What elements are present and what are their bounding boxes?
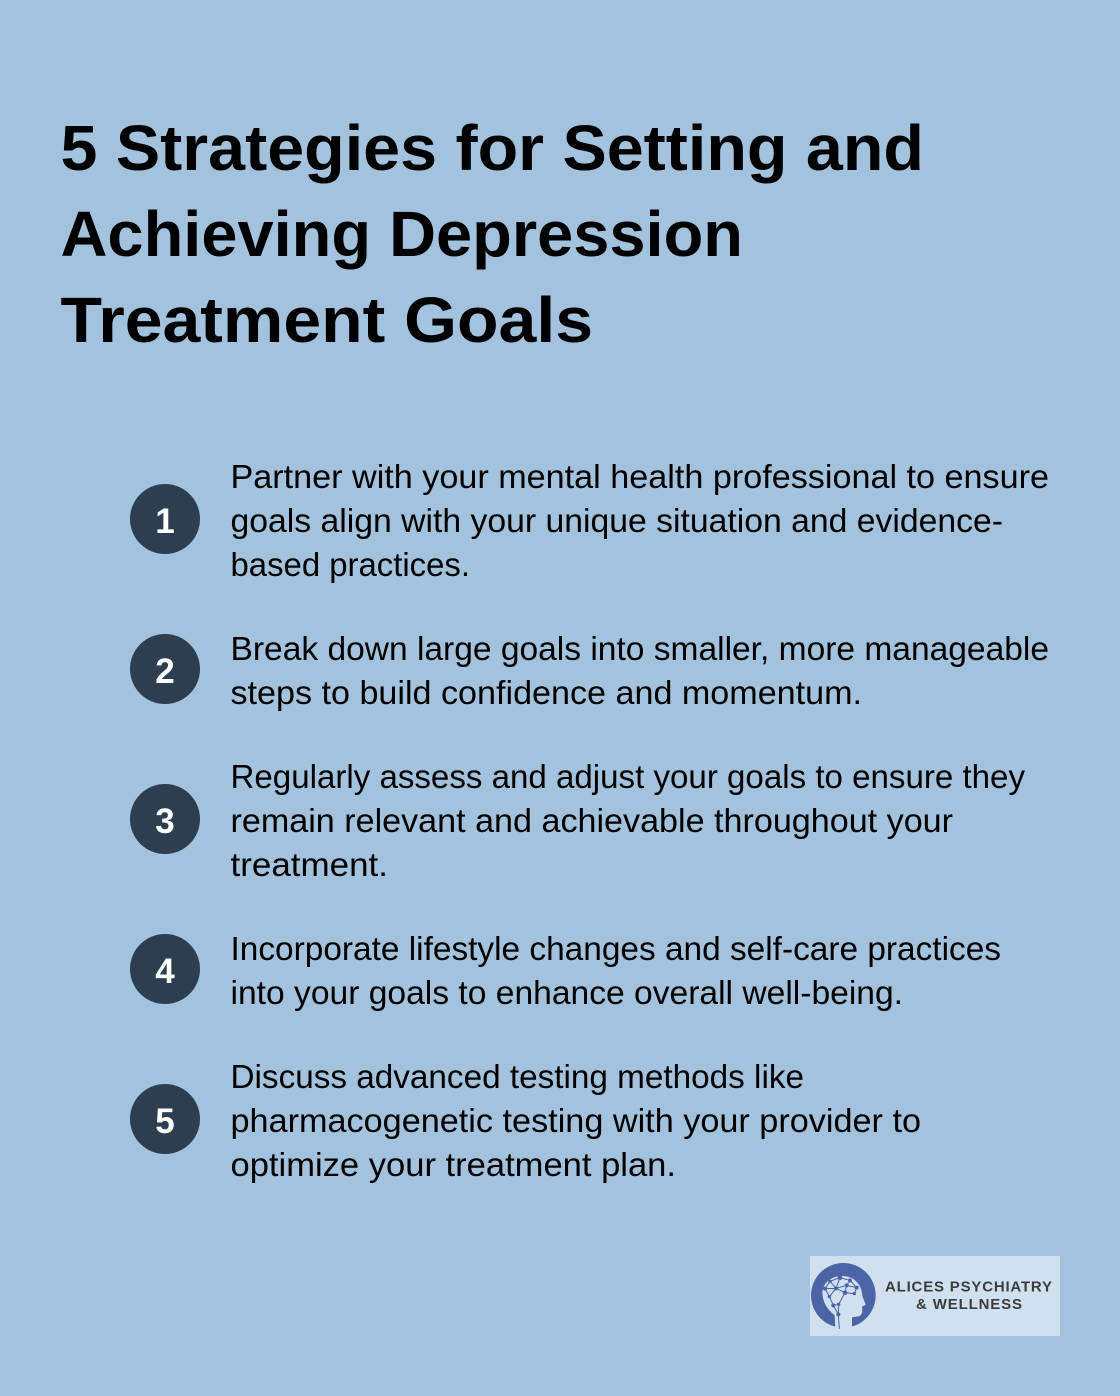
- title: Achieving Depression: [60, 198, 743, 270]
- number badge 3: 3: [155, 802, 175, 841]
- title: Treatment Goals: [60, 284, 593, 356]
- strategy 5 text: optimize your treatment plan.: [230, 1146, 676, 1183]
- strategy 4 text: Incorporate lifestyle changes and self-care practices: [230, 930, 1001, 967]
- strategy 1: [130, 458, 1049, 583]
- strategy 1 text: [230, 458, 1049, 583]
- logo panel: [810, 1256, 1060, 1336]
- strategy 2 text: steps to build confidence and momentum.: [230, 674, 862, 711]
- number badge 4: [130, 934, 200, 1004]
- number badge 4: 4: [155, 952, 175, 991]
- strategy 5 text: Discuss advanced testing methods like: [230, 1058, 804, 1095]
- strategy 3 text: Regularly assess and adjust your goals to ensure they: [230, 758, 1025, 795]
- strategy 4 text: into your goals to enhance overall well-being.: [230, 974, 903, 1011]
- strategy 2 text: [230, 630, 1049, 711]
- number badge 5: 5: [155, 1102, 175, 1141]
- number badge 3: [130, 784, 200, 854]
- title: [60, 112, 924, 356]
- strategy 3 text: remain relevant and achievable throughout your: [230, 802, 953, 839]
- strategy 1 text: goals align with your unique situation and evidence-: [230, 502, 1003, 539]
- number badge 1: [130, 484, 200, 554]
- strategy 2: [130, 630, 1049, 711]
- strategy 4: [130, 930, 1001, 1011]
- strategy 3: [130, 758, 1025, 883]
- number badge 5: [130, 1084, 200, 1154]
- title: 5 Strategies for Setting and: [60, 112, 924, 184]
- logo text: & WELLNESS: [916, 1296, 1022, 1313]
- strategy 1 text: Partner with your mental health professional to ensure: [230, 458, 1049, 495]
- strategy 3 text: [230, 758, 1025, 883]
- number badge 2: 2: [155, 652, 175, 691]
- number badge 1: 1: [155, 502, 175, 541]
- strategy 3 text: treatment.: [230, 846, 388, 883]
- strategy 4 text: [230, 930, 1001, 1011]
- strategy 1 text: based practices.: [230, 546, 470, 583]
- icon: head with brain network: [811, 1263, 876, 1329]
- strategy 2 text: Break down large goals into smaller, more manageable: [230, 630, 1049, 667]
- logo text: [885, 1278, 1052, 1313]
- number badge 2: [130, 634, 200, 704]
- logo text: ALICES PSYCHIATRY: [885, 1278, 1052, 1296]
- strategy 5 text: pharmacogenetic testing with your provider to: [230, 1102, 921, 1139]
- strategy 5: [130, 1058, 921, 1183]
- strategy 5 text: [230, 1058, 921, 1183]
